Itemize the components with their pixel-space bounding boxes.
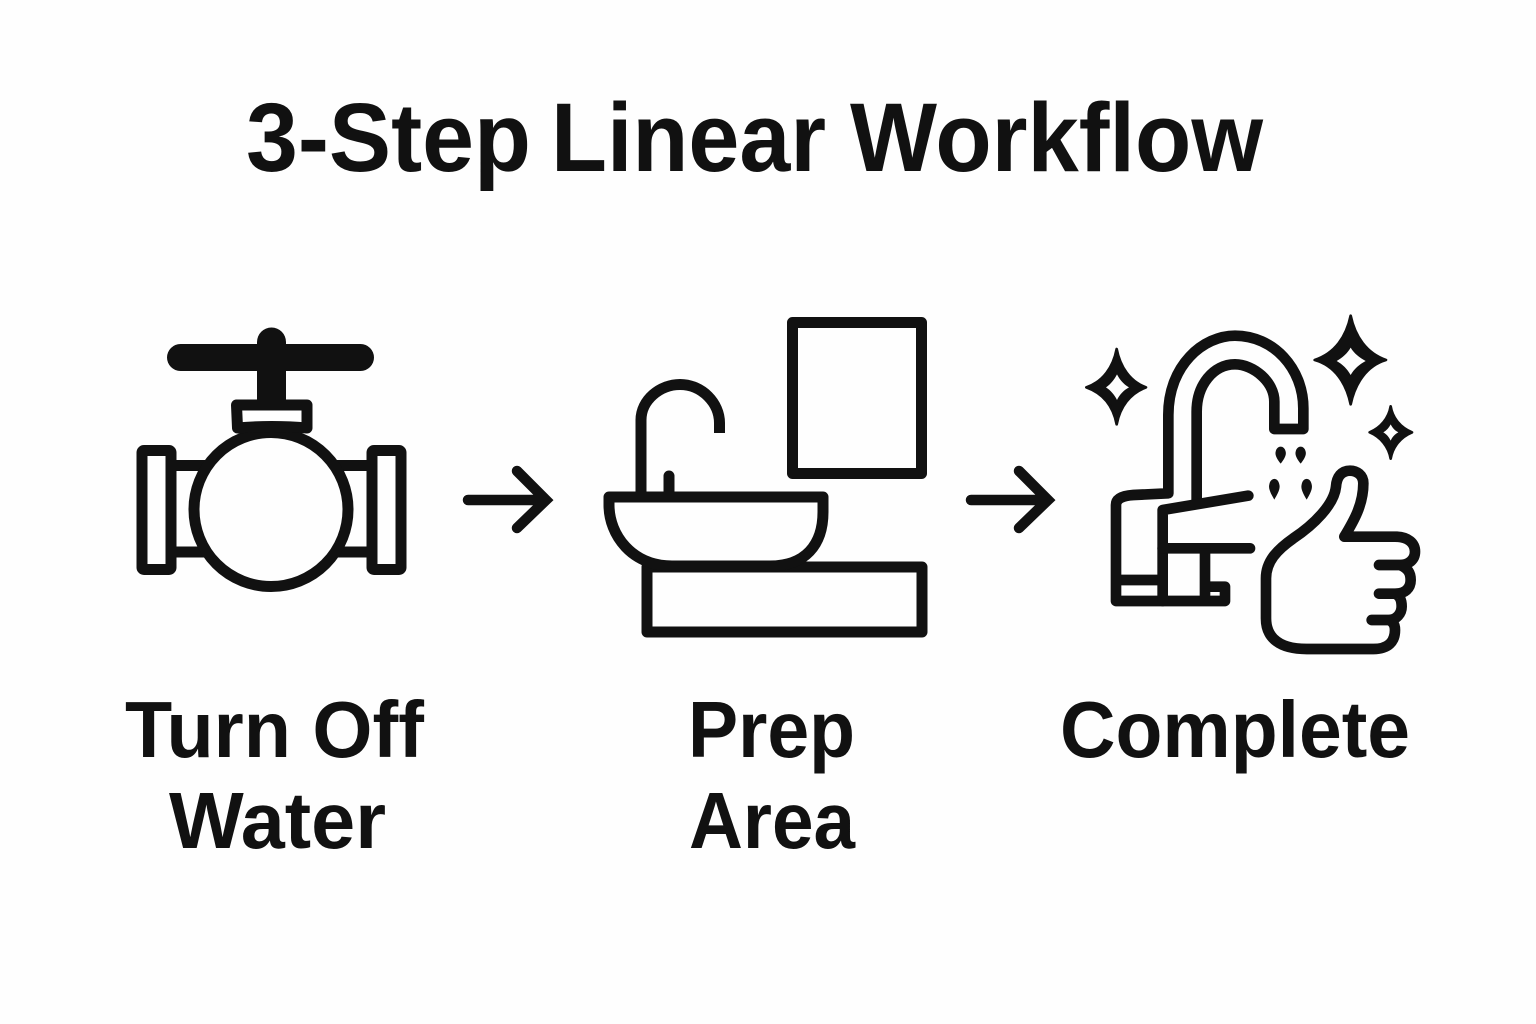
water drops — [1269, 447, 1312, 500]
sparkle highlights — [1106, 348, 1398, 441]
icon: faucet, thumbs up and sparkles — [1086, 316, 1415, 649]
label: prep area: Area — [689, 776, 855, 865]
title: Linear — [551, 83, 826, 192]
icon: sink, mirror and cabinet — [609, 322, 922, 632]
label: turn off water: Water — [169, 776, 386, 865]
label: prep area — [688, 685, 855, 865]
arrow: step 2 to step 3 — [971, 471, 1048, 528]
icon: valve — [142, 328, 401, 586]
step 1: turn off water — [125, 328, 424, 865]
faucet — [1116, 336, 1303, 601]
label: turn off water — [125, 685, 424, 865]
arrow: step 1 to step 2 — [468, 471, 546, 528]
step 3: complete — [1060, 316, 1415, 774]
step 2: prep area — [609, 322, 922, 865]
label: turn off water: Turn Off — [125, 685, 424, 774]
label: prep area: Prep — [688, 685, 855, 774]
sparkles — [1086, 316, 1412, 459]
title: Workflow — [850, 83, 1264, 192]
title: 3-Step — [246, 83, 531, 192]
label: complete: Complete — [1060, 685, 1410, 774]
title — [246, 83, 1264, 192]
thumbs up — [1266, 471, 1415, 649]
